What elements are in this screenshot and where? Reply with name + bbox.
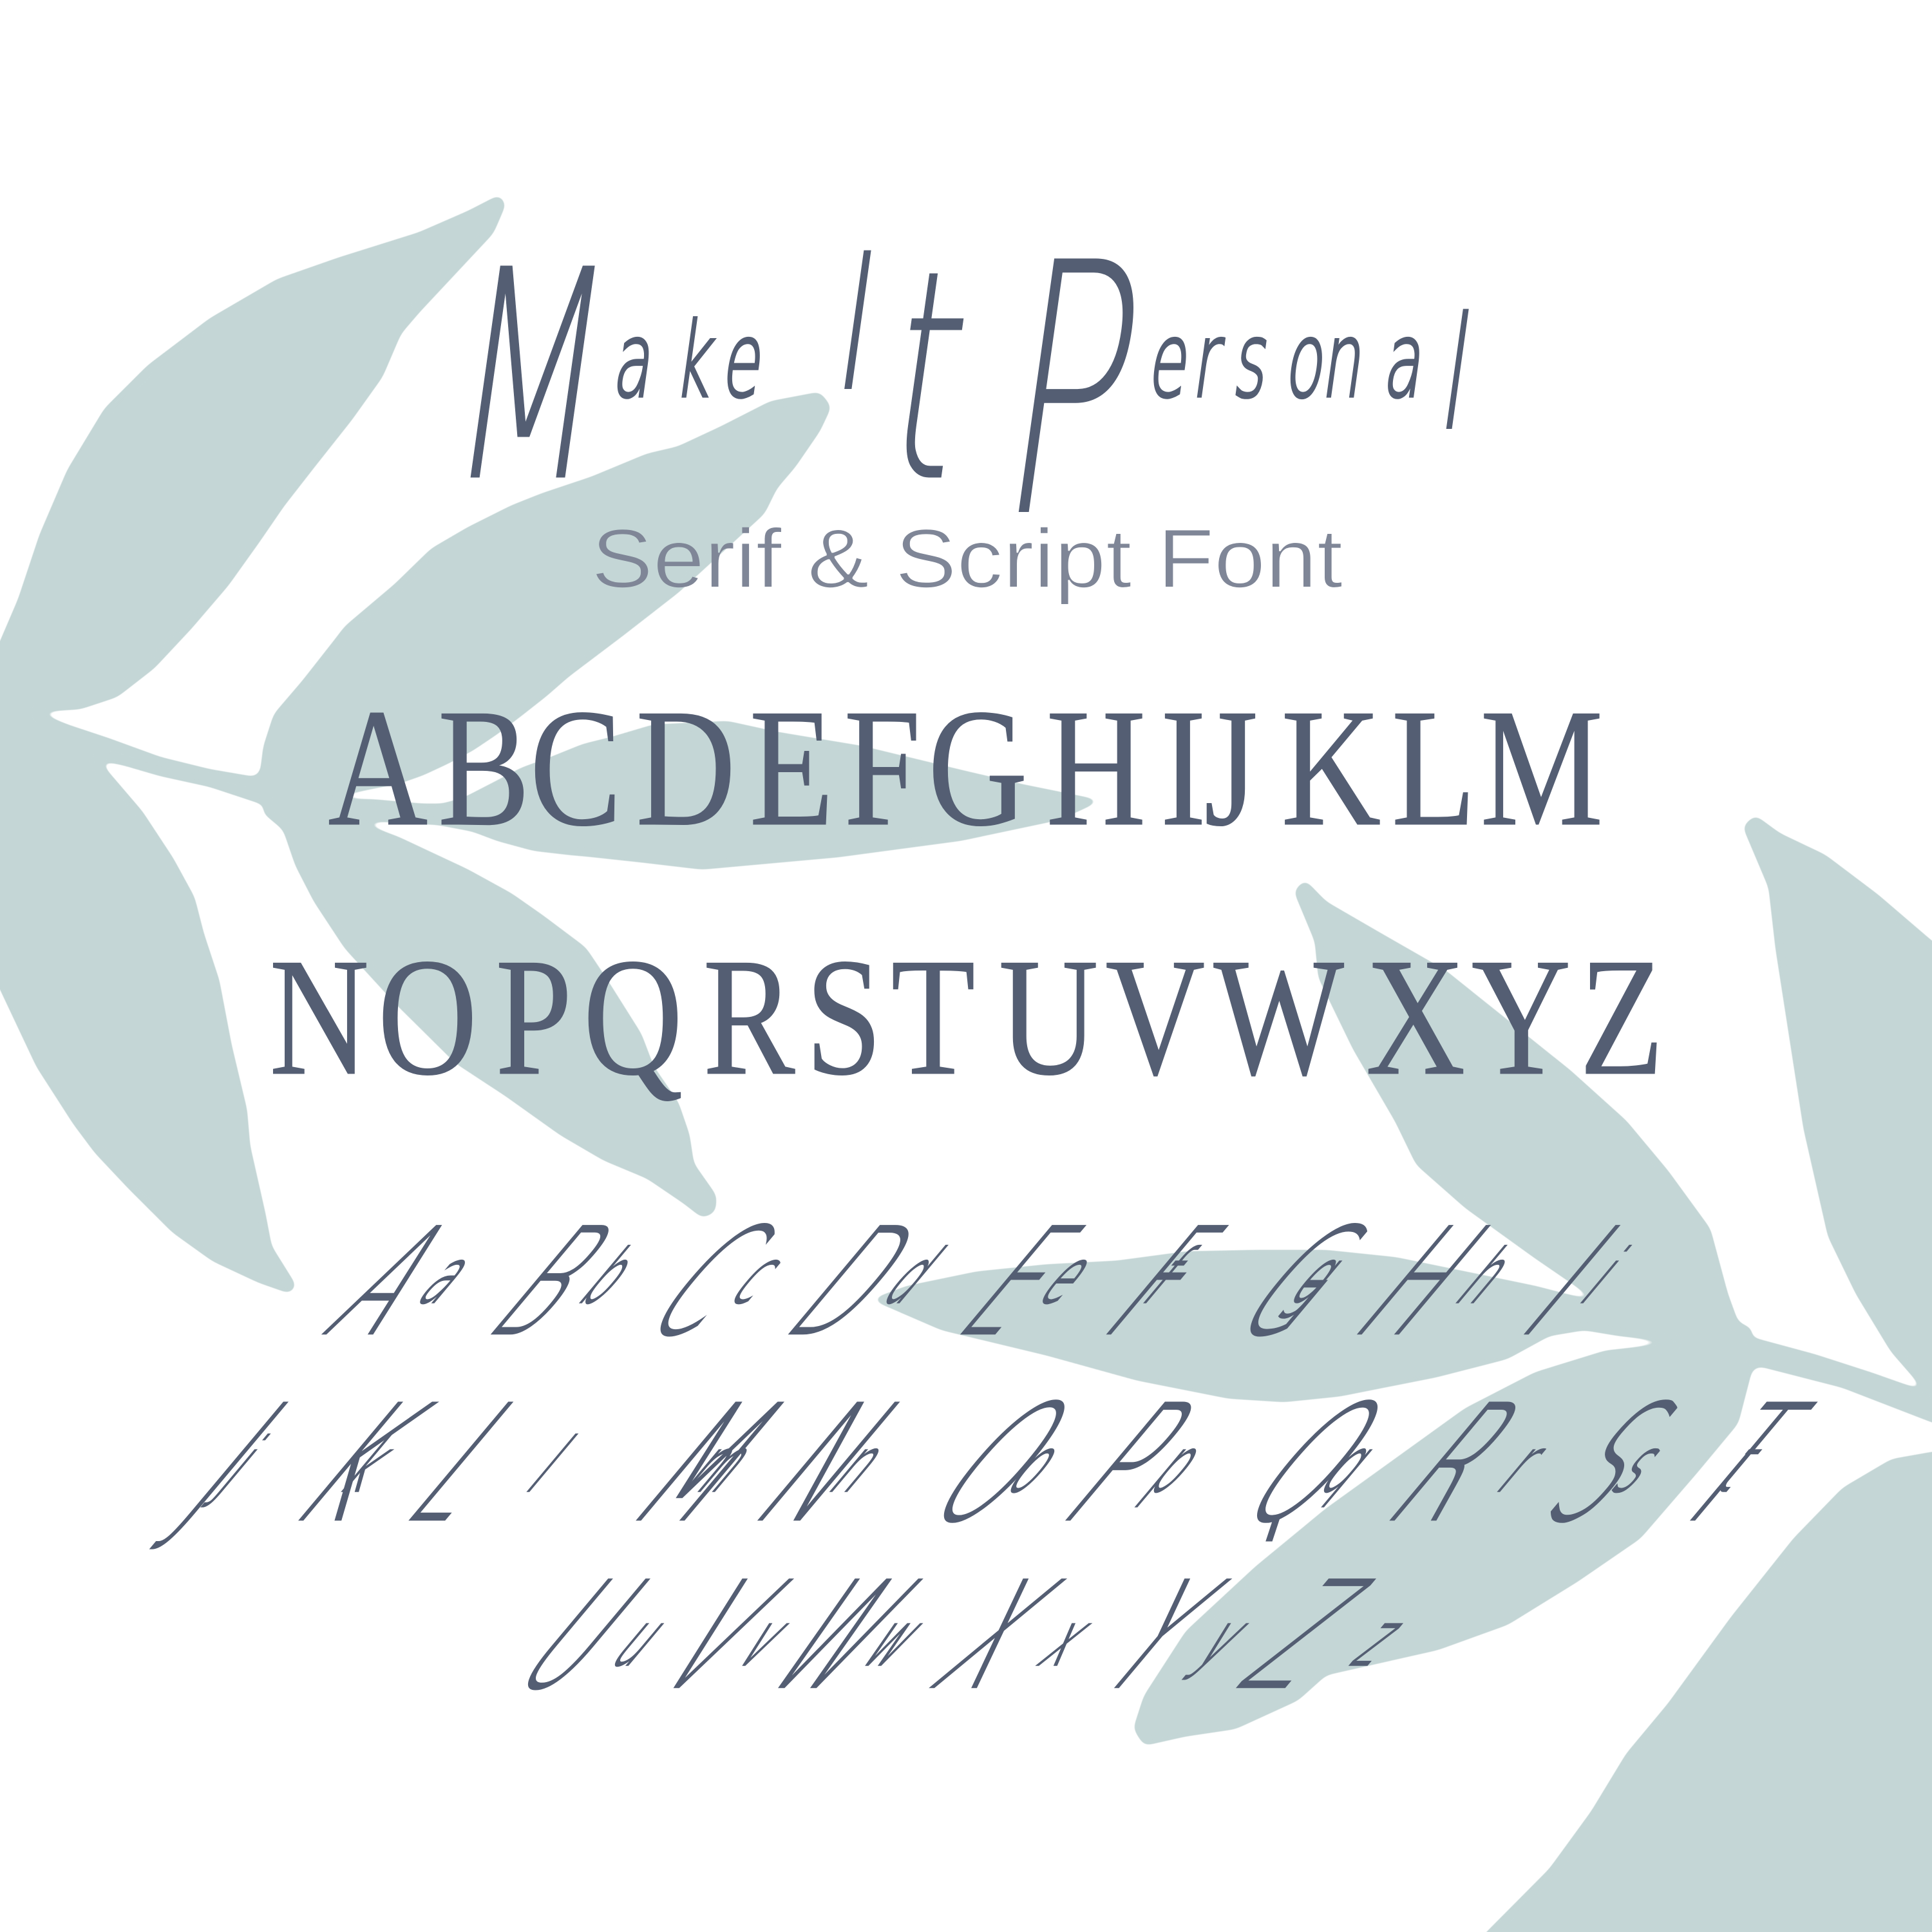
script alphabet line 1: h: [1437, 1234, 1535, 1320]
script alphabet line 2: R: [1347, 1371, 1566, 1558]
script alphabet line 2: r: [1479, 1423, 1568, 1509]
script alphabet line 2: S: [1504, 1371, 1717, 1558]
subtitle: Serif & Script Font: [591, 511, 1343, 605]
script alphabet line 3: v: [717, 1596, 814, 1683]
script alphabet line 1: g: [1271, 1234, 1367, 1320]
script alphabet line 2: p: [1129, 1423, 1227, 1509]
script alphabet line 2: k: [321, 1423, 417, 1509]
script alphabet line 1: D: [750, 1197, 957, 1369]
script alphabet line 3: y: [1177, 1596, 1273, 1683]
script alphabet line 2: L: [366, 1371, 573, 1558]
script alphabet line 1: A: [290, 1197, 491, 1369]
script alphabet line 2: K: [252, 1371, 467, 1558]
script alphabet line 1: e: [1019, 1234, 1117, 1320]
script alphabet line 1: i: [1562, 1234, 1645, 1320]
script alphabet line 3: V: [620, 1550, 820, 1723]
script alphabet line 2: q: [1301, 1423, 1399, 1509]
script alphabet line 3: z: [1333, 1596, 1426, 1683]
script alphabet line 1: G: [1198, 1197, 1406, 1369]
script alphabet line 1: C: [609, 1197, 810, 1369]
script alphabet line 3: u: [592, 1596, 690, 1683]
script alphabet line 3: X: [896, 1550, 1096, 1723]
title: Make It Personal: P: [981, 189, 1164, 594]
script alphabet line 2: t: [1698, 1423, 1786, 1509]
title: Make It Personal: t: [871, 209, 987, 546]
script alphabet line 2: j: [200, 1423, 284, 1509]
script alphabet line 3: w: [843, 1596, 949, 1683]
title: Make It Personal: ake: [608, 301, 772, 421]
script alphabet line 3: x: [1020, 1596, 1116, 1683]
script alphabet line 1: b: [561, 1234, 659, 1320]
script alphabet line 1: d: [864, 1234, 961, 1320]
leaf branch: bottom right: [872, 816, 1932, 1932]
script alphabet line 2: T: [1634, 1371, 1845, 1558]
script alphabet line 1: c: [712, 1234, 806, 1320]
script alphabet line 1: I: [1485, 1197, 1654, 1369]
script alphabet line 2: s: [1593, 1423, 1687, 1509]
script alphabet line 2: J: [142, 1371, 325, 1558]
script alphabet line 3: W: [729, 1550, 954, 1723]
script alphabet line 2: n: [811, 1423, 909, 1509]
title: Make It Personal: l: [1432, 285, 1482, 465]
script alphabet line 2: N: [715, 1371, 938, 1558]
script alphabet line 2: P: [1023, 1371, 1233, 1558]
script alphabet line 3: U: [478, 1550, 683, 1723]
script alphabet line 2: o: [988, 1423, 1085, 1509]
script alphabet line 1: f: [1124, 1234, 1211, 1320]
leaf branch: top left: [0, 196, 1100, 1293]
title: Make It Personal: I: [826, 214, 889, 432]
script alphabet line 2: Q: [1201, 1371, 1428, 1558]
script alphabet line 1: B: [452, 1197, 650, 1369]
serif alphabet line 1: ABCDEFGHIJKLM: [328, 674, 1603, 861]
script alphabet line 1: a: [399, 1234, 497, 1320]
script alphabet line 3: Y: [1063, 1550, 1257, 1723]
script alphabet line 2: l: [508, 1423, 592, 1509]
script alphabet line 2: M: [591, 1371, 824, 1558]
script alphabet line 3: Z: [1204, 1550, 1404, 1723]
script alphabet line 1: H: [1318, 1197, 1524, 1369]
script alphabet line 2: O: [888, 1371, 1115, 1558]
serif alphabet line 2: NOPQRSTUVWXYZ: [269, 923, 1664, 1110]
title: Make It Personal: ersona: [1143, 301, 1433, 421]
script alphabet line 2: m: [665, 1423, 777, 1509]
title: Make It Personal: M: [433, 209, 630, 546]
script alphabet line 1: F: [1068, 1197, 1259, 1369]
script alphabet line 1: E: [922, 1197, 1118, 1369]
